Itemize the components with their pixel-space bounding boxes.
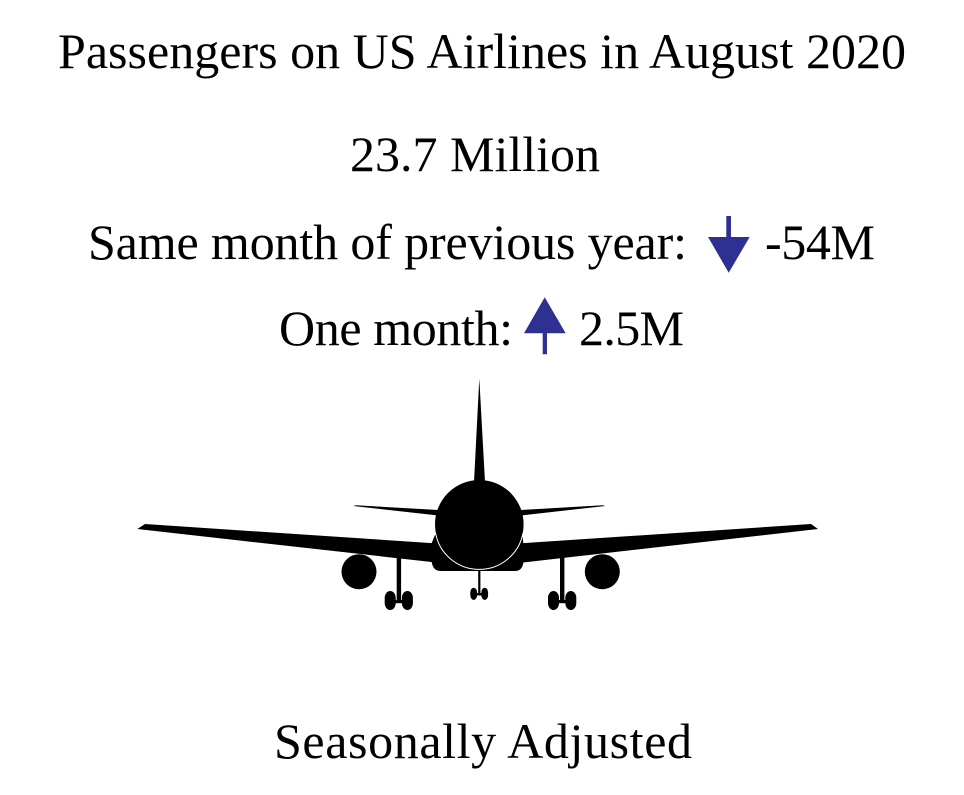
icon: airplane front view	[137, 378, 818, 610]
monthly comparison label: One month:	[279, 300, 513, 356]
belly fairing	[432, 535, 523, 571]
icon: down arrow	[708, 216, 750, 273]
tail fin	[474, 378, 485, 482]
yearly comparison label: Same month of previous year:	[88, 214, 687, 270]
footer note: Seasonally Adjusted	[274, 713, 692, 769]
title: Passengers on US Airlines in August 2020	[58, 23, 906, 79]
fuselage	[435, 480, 524, 569]
left stabilizer	[353, 505, 445, 516]
right engine	[585, 554, 620, 589]
nose landing gear	[470, 570, 488, 600]
left engine	[342, 554, 376, 589]
left landing gear	[385, 555, 413, 610]
main value: passenger count: 23.7 Million	[350, 126, 600, 182]
left wing	[137, 524, 445, 564]
yearly change value: -54M	[765, 214, 875, 270]
fuselage highlight	[436, 533, 523, 569]
monthly change value: 2.5M	[579, 300, 684, 356]
icon: up arrow	[524, 297, 566, 354]
right stabilizer	[514, 505, 605, 516]
right wing	[510, 524, 818, 564]
right landing gear	[548, 555, 576, 610]
